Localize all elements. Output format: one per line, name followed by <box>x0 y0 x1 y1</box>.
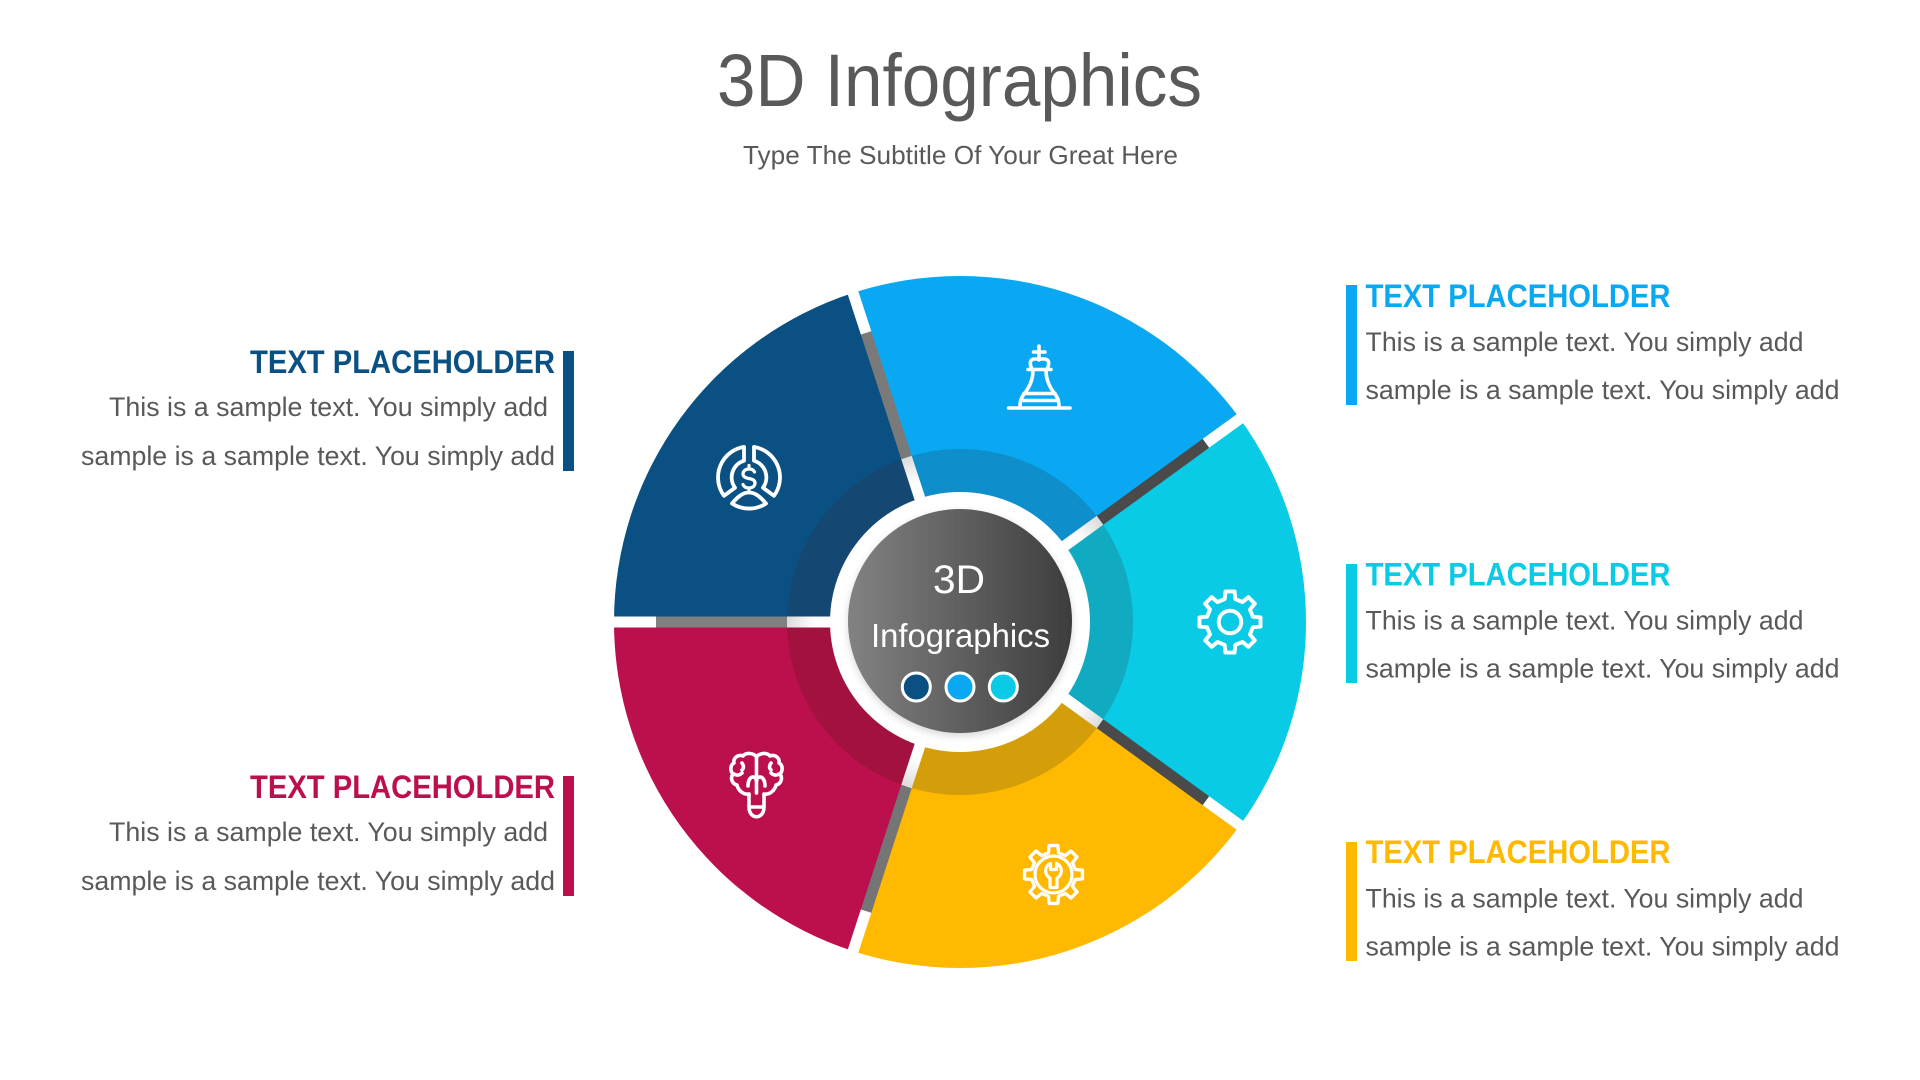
center hub: 3D <box>933 558 985 602</box>
title: 3D Infographics <box>717 39 1202 122</box>
text block: navy: TEXT PLACEHOLDER <box>250 344 555 380</box>
icon: gear with wrench <box>1025 846 1082 903</box>
segment: navy <box>614 293 960 622</box>
text block: cyan: sample is a sample text. You simply add <box>1366 654 1840 684</box>
text block: yellow: TEXT PLACEHOLDER <box>1366 834 1670 870</box>
text block: crimson: sample is a sample text. You simply add <box>81 866 555 896</box>
text block: navy: sample is a sample text. You simply add <box>81 441 555 471</box>
segment: yellow <box>853 622 1240 968</box>
text block: cyan: TEXT PLACEHOLDER <box>1366 556 1670 592</box>
text block: yellow <box>1346 834 1840 962</box>
text block: crimson: This is a sample text. You simply add <box>109 817 548 847</box>
icon: dollar target <box>718 447 780 509</box>
center hub: Infographics <box>871 617 1050 654</box>
segment: cyan <box>960 419 1306 825</box>
icon: gear <box>1199 591 1261 653</box>
icon: brain bulb <box>731 753 782 817</box>
text block: light blue: This is a sample text. You simply add <box>1366 327 1804 357</box>
text block: yellow: sample is a sample text. You simply add <box>1366 932 1840 962</box>
icon: chess king <box>1008 346 1070 408</box>
text block: cyan: This is a sample text. You simply add <box>1366 606 1804 636</box>
segment: crimson <box>614 622 960 951</box>
subtitle: Type The Subtitle Of Your Great Here <box>743 140 1178 170</box>
text block: light blue: sample is a sample text. You simply add <box>1366 375 1840 405</box>
text block: light blue: TEXT PLACEHOLDER <box>1366 278 1670 314</box>
center hub <box>830 492 1090 752</box>
text block: crimson: TEXT PLACEHOLDER <box>250 769 555 805</box>
text block: crimson <box>81 769 574 896</box>
text block: cyan <box>1346 556 1840 684</box>
text block: navy: This is a sample text. You simply add <box>109 392 548 422</box>
text block: light blue <box>1346 278 1840 405</box>
text block: yellow: This is a sample text. You simply add <box>1366 884 1804 914</box>
text block: navy <box>81 344 574 471</box>
donut chart <box>610 276 1306 968</box>
segment: light blue <box>853 276 1240 622</box>
